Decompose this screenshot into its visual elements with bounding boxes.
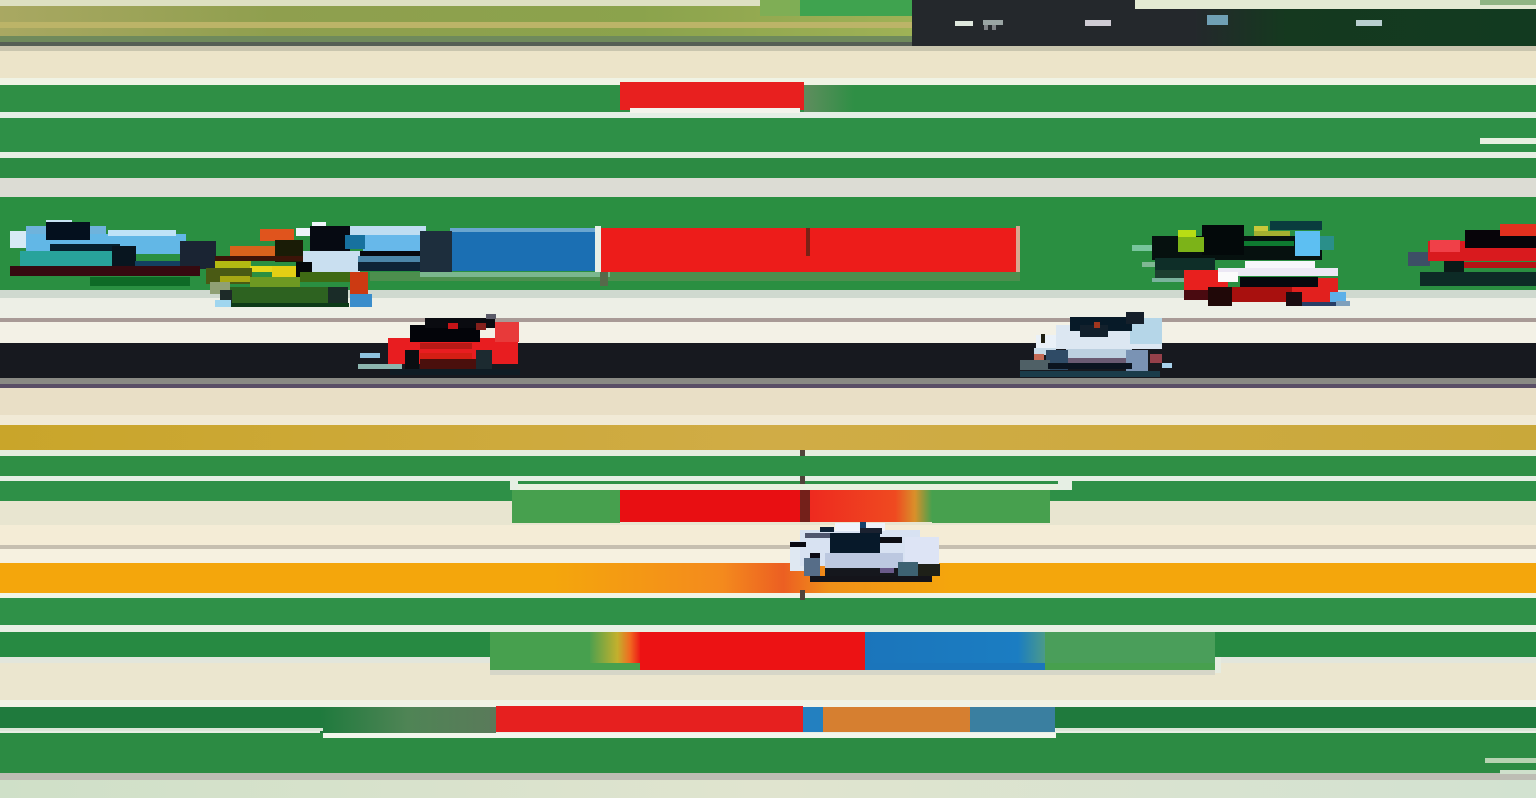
- road segment: lower red and blue: [490, 632, 1221, 675]
- car: orange, yellow and green: [206, 229, 372, 307]
- car: white and blue, stacked: [296, 222, 452, 272]
- car: red on dark road, left: [358, 314, 520, 375]
- top strip: grass field and dark road: [0, 0, 1536, 46]
- road segment: middle red and green: [490, 456, 1072, 523]
- centre pole: vertical mark: [800, 450, 805, 600]
- red road segment: upper: [620, 82, 854, 113]
- car: blue, far left: [10, 220, 216, 286]
- blue and red blocks: main upper row: [370, 226, 1020, 286]
- car: white, centre: [790, 522, 940, 582]
- car: red with white roof, right: [1184, 261, 1350, 306]
- car: white on dark road, right: [1020, 312, 1172, 377]
- car: green and black, right: [1132, 221, 1334, 282]
- road segment: bottom multicolour: [0, 706, 1536, 738]
- car: red, far right edge: [1408, 224, 1536, 286]
- lane marks: right edge: [1480, 138, 1536, 774]
